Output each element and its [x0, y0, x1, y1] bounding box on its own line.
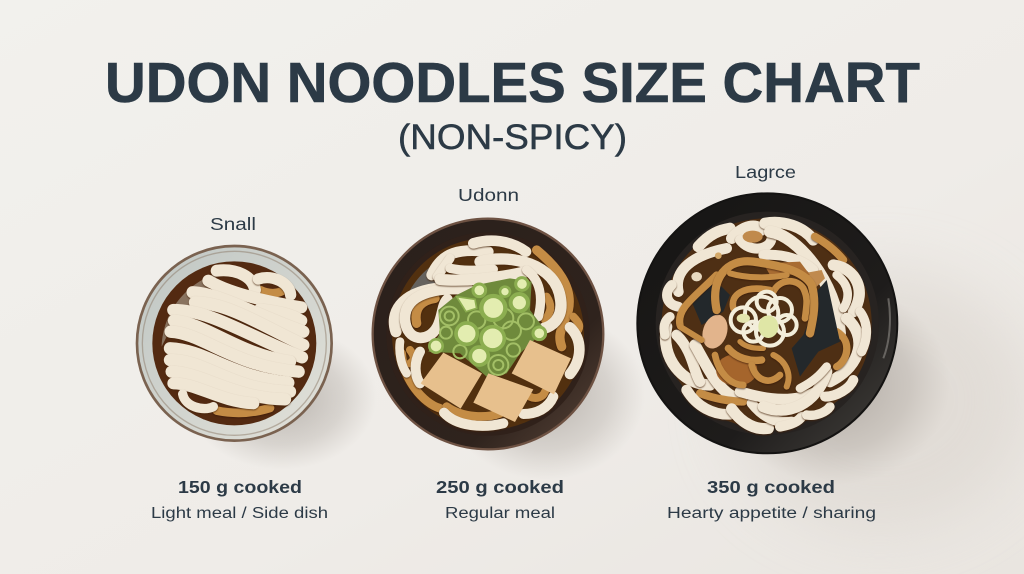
small bowl column: [137, 214, 377, 522]
title: UDON NOODLES SIZE CHART: [105, 51, 920, 115]
tofu cubes: [421, 340, 571, 422]
size label: large: Lagrce: [735, 162, 796, 182]
weight label: large: 350 g cooked: [707, 477, 835, 497]
shadow: large bowl: [720, 285, 950, 485]
size label: regular: Udonn: [458, 185, 519, 205]
shadow: small bowl: [187, 326, 377, 470]
regular bowl column: [373, 185, 645, 522]
icon: large udon bowl: [637, 193, 897, 453]
description: regular: Regular meal: [445, 505, 555, 522]
weight label: regular: 250 g cooked: [436, 477, 564, 497]
large bowl column: [637, 162, 950, 522]
fried tofu and mushroom: [716, 354, 757, 386]
icon: regular udon bowl: [373, 219, 603, 449]
seaweed: [692, 278, 840, 377]
weight label: small: 150 g cooked: [178, 477, 302, 497]
description: small: Light meal / Side dish: [151, 505, 328, 522]
brown noodles: [680, 275, 717, 325]
background shading right: [730, 270, 1024, 530]
sliced leek garnish: [731, 292, 797, 346]
shadow: regular bowl: [445, 310, 645, 480]
rim highlight: [883, 298, 890, 358]
green onions: [428, 278, 546, 377]
description: large: Hearty appetite / sharing: [667, 505, 876, 522]
icon: small udon bowl: [137, 246, 332, 441]
subtitle: (NON-SPICY): [398, 118, 627, 157]
size label: small: Snall: [210, 214, 256, 234]
